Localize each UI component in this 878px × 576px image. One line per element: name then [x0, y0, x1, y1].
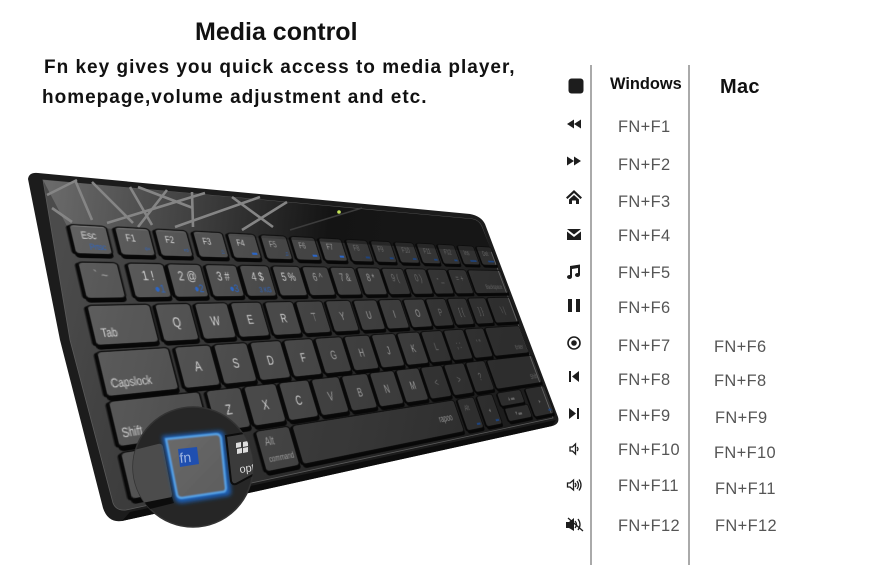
- function key row: ▬▬: [469, 257, 477, 263]
- QWERTY key row: I: [391, 308, 397, 320]
- function key row: ▬▬: [487, 258, 495, 264]
- ASDF key row: F: [298, 350, 308, 365]
- bottom key row: ▬: [494, 415, 500, 423]
- description text: homepage,volume adjustment and etc.: [42, 87, 428, 108]
- ZXCV key row: B: [355, 385, 364, 399]
- Windows shortcut list: FN+F8: [618, 371, 671, 389]
- number key row: 6 ^: [311, 270, 324, 283]
- Windows shortcut list: FN+F1: [618, 118, 671, 136]
- number key row: 2 @: [176, 268, 198, 283]
- keyboard: [28, 172, 575, 528]
- function key row: F6: [297, 241, 307, 251]
- icon: record: [568, 337, 580, 349]
- icon: stop: [568, 78, 584, 94]
- ASDF key row: K: [409, 342, 417, 355]
- ASDF key row: A: [192, 358, 203, 375]
- ASDF key row: Capslock: [109, 374, 154, 391]
- function key row: ▬: [411, 255, 417, 262]
- bottom key row: ▬: [475, 419, 481, 427]
- function key row: ▬: [338, 252, 345, 259]
- ZXCV key row: Shift: [529, 372, 538, 381]
- number key row: ` ~: [92, 266, 110, 283]
- QWERTY key row: Tab: [100, 326, 119, 341]
- magnifier circle showing Fn key: [132, 406, 253, 528]
- bottom key row: ▴ ▬: [506, 393, 515, 402]
- column heading: Mac: Mac: [720, 76, 760, 98]
- ASDF key row: S: [230, 355, 241, 371]
- bottom key row: command: [268, 450, 295, 464]
- ZXCV key row: V: [325, 388, 335, 403]
- Windows shortcut list: FN+F4: [618, 227, 671, 245]
- function key row: ▬: [251, 248, 258, 257]
- function key row: ⇨: [182, 246, 190, 255]
- QWERTY key row: Q: [171, 314, 183, 330]
- function key row: ▬: [388, 254, 395, 261]
- icon: volume down: [570, 444, 578, 454]
- QWERTY key row: ] }: [477, 305, 485, 316]
- QWERTY key row: U: [365, 308, 374, 321]
- function key row: F3: [201, 237, 212, 247]
- function key row: ▬: [364, 253, 371, 260]
- ZXCV key row: N: [382, 381, 392, 395]
- Windows shortcut list: FN+F7: [618, 337, 671, 355]
- QWERTY key row: W: [209, 313, 222, 328]
- bottom key row: rapoo: [437, 412, 454, 425]
- icon: volume up: [568, 480, 581, 490]
- number key row: ●3: [228, 283, 240, 295]
- bottom key row: ▾ ▬: [514, 408, 523, 417]
- number key row: ●1: [154, 283, 167, 296]
- function key row: Ins: [463, 249, 471, 257]
- ASDF key row: Enter: [514, 343, 524, 351]
- Mac shortcut list: FN+F6: [714, 338, 767, 356]
- bottom key row: Ctrl: [137, 477, 153, 492]
- QWERTY key row: [ {: [457, 306, 465, 317]
- number key row: 0 ): [412, 272, 423, 283]
- ZXCV key row: >: [455, 373, 463, 385]
- function key row: F10: [400, 246, 411, 255]
- function key row: ⌂: [220, 247, 226, 256]
- icon: fast forward: [567, 156, 581, 166]
- magnifier circle showing Fn key: opt: [239, 462, 256, 476]
- Mac shortcut list: FN+F8: [714, 372, 767, 390]
- number key row: 3 KG: [258, 286, 273, 294]
- QWERTY key row: T: [309, 310, 318, 324]
- function key row: Del: [481, 250, 490, 258]
- function key row: ▬: [433, 255, 438, 262]
- icon: pause: [568, 299, 580, 312]
- function key row: F12: [443, 248, 453, 257]
- Windows shortcut list: [618, 118, 680, 535]
- function key row: F1: [124, 233, 137, 245]
- number key row: 7 &: [338, 271, 352, 283]
- Windows shortcut list: FN+F6: [618, 299, 671, 317]
- Windows shortcut list: FN+F5: [618, 264, 671, 282]
- ASDF key row: H: [357, 346, 366, 359]
- ZXCV key row: <: [432, 375, 440, 388]
- Windows shortcut list: FN+F3: [618, 193, 671, 211]
- icon: home: [566, 190, 582, 204]
- decorative line pattern: [47, 180, 362, 230]
- icon: rewind: [567, 120, 581, 128]
- bottom key row: ▸: [537, 397, 542, 405]
- title: Media control: [195, 18, 358, 46]
- icon: mail: [567, 229, 581, 240]
- function key row: F4: [235, 238, 246, 249]
- indicator light: [337, 210, 341, 214]
- function key row: F2: [164, 235, 176, 246]
- icon: music note: [567, 264, 580, 279]
- Mac shortcut list: FN+F11: [715, 480, 776, 498]
- icon: next: [569, 408, 579, 419]
- Mac shortcut list: FN+F10: [714, 444, 776, 462]
- Fn logo: fn: [179, 449, 192, 466]
- ASDF key row: ' ": [475, 337, 483, 349]
- number key row: [74, 261, 510, 303]
- ZXCV key row: X: [260, 396, 270, 412]
- function key row: Prtsc: [88, 242, 107, 252]
- ZXCV key row: ?: [477, 370, 484, 382]
- bottom key row: Alt: [263, 435, 276, 449]
- description text: Fn key gives you quick access to media player,: [44, 57, 516, 78]
- QWERTY key row: O: [413, 307, 422, 319]
- Mac shortcut list: FN+F9: [715, 409, 768, 427]
- ASDF key row: [93, 326, 530, 401]
- QWERTY key row: E: [245, 312, 256, 327]
- QWERTY key row: [83, 296, 519, 350]
- bottom key row: Alt: [463, 403, 471, 412]
- function key row: F8: [352, 244, 361, 253]
- ZXCV key row: Shift: [120, 424, 144, 441]
- number key row: 1 !: [140, 267, 156, 283]
- bottom key row: ▬: [547, 405, 552, 412]
- function key row: [65, 224, 516, 437]
- ASDF key row: J: [384, 344, 392, 357]
- media icons column: [566, 78, 584, 532]
- function key row: ▬: [311, 251, 318, 259]
- ASDF key row: ; :: [454, 339, 463, 351]
- column heading: Windows: Windows: [610, 75, 682, 93]
- Windows shortcut list: FN+F10: [618, 441, 680, 459]
- bottom key row: [117, 386, 555, 504]
- icon: previous: [569, 371, 579, 382]
- ZXCV key row: C: [294, 392, 304, 408]
- column divider lines: [590, 65, 690, 565]
- Mac shortcut list: [714, 338, 777, 535]
- function key row: Esc: [80, 230, 98, 242]
- number key row: - _: [434, 272, 445, 283]
- ASDF key row: L: [433, 340, 440, 353]
- ASDF key row: G: [328, 348, 339, 362]
- QWERTY key row: Y: [338, 309, 347, 323]
- function key row: ⇦: [144, 244, 152, 254]
- function key row: F7: [326, 243, 335, 252]
- Windows shortcut list: FN+F11: [618, 477, 679, 495]
- number key row: ●2: [192, 283, 205, 295]
- Windows shortcut list: FN+F12: [618, 517, 680, 535]
- description text: [42, 57, 516, 108]
- ASDF key row: D: [265, 352, 276, 368]
- function key row: F9: [377, 245, 385, 254]
- function key row: ♫: [283, 250, 289, 258]
- ZXCV key row: [104, 355, 543, 452]
- number key row: 3 #: [215, 268, 232, 283]
- QWERTY key row: \ |: [499, 305, 507, 315]
- icon: mute: [566, 518, 583, 531]
- Mac shortcut list: FN+F12: [715, 517, 777, 535]
- function key row: F5: [268, 240, 278, 250]
- bottom key row: ◂: [487, 406, 492, 414]
- function key row: ▬: [453, 256, 459, 263]
- QWERTY key row: P: [436, 306, 444, 318]
- number key row: Backspace: [485, 283, 503, 290]
- function key row: F11: [422, 247, 432, 256]
- number key row: 9 (: [389, 271, 401, 283]
- key grid: [65, 224, 555, 504]
- Windows shortcut list: FN+F2: [618, 156, 671, 174]
- number key row: 8 *: [365, 271, 377, 283]
- number key row: 4 $: [249, 269, 265, 283]
- QWERTY key row: R: [278, 311, 288, 325]
- Windows shortcut list: FN+F9: [618, 407, 671, 425]
- ZXCV key row: Z: [223, 401, 234, 418]
- number key row: 5 %: [279, 270, 297, 283]
- number key row: = +: [454, 272, 465, 283]
- ZXCV key row: M: [408, 378, 417, 392]
- Windows key icon: [236, 441, 248, 454]
